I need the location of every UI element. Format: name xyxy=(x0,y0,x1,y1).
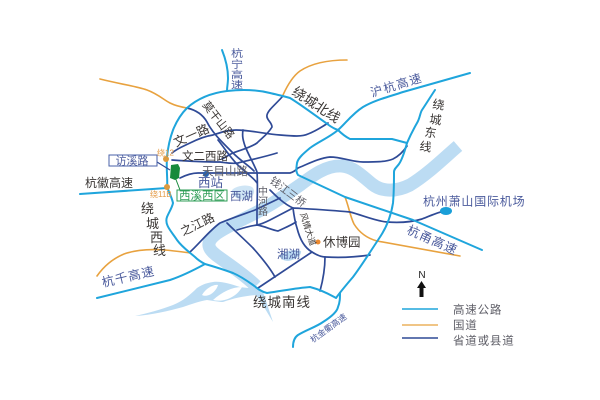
leader line: Xixi West xyxy=(175,177,180,190)
marker: expo park xyxy=(316,240,320,244)
road labels: 西 xyxy=(150,230,163,245)
provincial and county roads xyxy=(172,97,445,291)
river: Qiantang xyxy=(135,146,458,322)
road labels: 中 xyxy=(258,185,268,198)
marker: west station xyxy=(203,171,209,177)
leader line: Fangxi Road xyxy=(157,162,170,170)
road labels: 绕 xyxy=(141,201,154,216)
road labels: 绕12 xyxy=(157,148,174,158)
road labels: 钱江三桥 xyxy=(267,174,309,210)
legend: 国道 xyxy=(453,318,478,332)
road labels: 路 xyxy=(258,205,268,218)
road labels: 杭州萧山国际机场 xyxy=(423,194,525,208)
road labels: 城 xyxy=(146,216,159,231)
marker: exit 11 xyxy=(164,184,170,190)
road labels: 绕 xyxy=(432,97,445,113)
road labels: 河 xyxy=(258,196,268,208)
road labels: 绕城南线 xyxy=(253,295,311,310)
road labels: 莫干山路 xyxy=(200,99,237,142)
road labels: 杭甬高速 xyxy=(405,222,460,258)
road labels: 高 xyxy=(231,69,243,81)
road labels: 宁 xyxy=(231,58,243,71)
road labels: 绕城北线 xyxy=(289,84,343,126)
road labels: 线 xyxy=(153,243,166,258)
road labels: 文二西路 xyxy=(182,149,228,163)
north arrow xyxy=(417,270,426,297)
legend: 高速公路 xyxy=(453,302,502,316)
legend xyxy=(402,302,514,348)
north arrow: N xyxy=(418,270,426,281)
road labels: 沪杭高速 xyxy=(368,70,425,100)
legend: 省道或县道 xyxy=(453,334,514,348)
road labels: 杭 xyxy=(231,47,243,60)
road labels: 线 xyxy=(419,139,432,155)
label box: Xixi West: 西溪西区 xyxy=(179,190,225,202)
road labels: 之江路 xyxy=(178,209,217,239)
road labels: 休博园 xyxy=(323,234,361,250)
label box: Fangxi Road xyxy=(109,154,157,168)
road labels: 杭徽高速 xyxy=(85,175,133,190)
road labels: 湘湖 xyxy=(277,247,300,261)
road labels: 城 xyxy=(429,112,442,128)
road labels: 杭千高速 xyxy=(100,263,156,290)
road labels: 风情大道 xyxy=(298,212,318,247)
road labels xyxy=(85,47,525,345)
green zone: Xixi West xyxy=(170,164,180,180)
road labels: 速 xyxy=(231,79,243,91)
expressways and ring road xyxy=(80,50,482,347)
road labels: 绕11B xyxy=(150,189,172,199)
road labels: 西湖 xyxy=(230,189,253,203)
road labels: 东 xyxy=(424,125,437,141)
national roads xyxy=(97,60,460,276)
label box: Fangxi Road: 访溪路 xyxy=(116,154,148,168)
road labels: 杭金衢高速 xyxy=(308,311,349,345)
road labels: 西站 xyxy=(198,176,223,190)
road labels: 文一路 xyxy=(171,121,212,150)
icon: airport xyxy=(440,207,452,215)
road labels: 天目山路 xyxy=(202,164,248,178)
marker: exit 12 xyxy=(163,156,169,162)
